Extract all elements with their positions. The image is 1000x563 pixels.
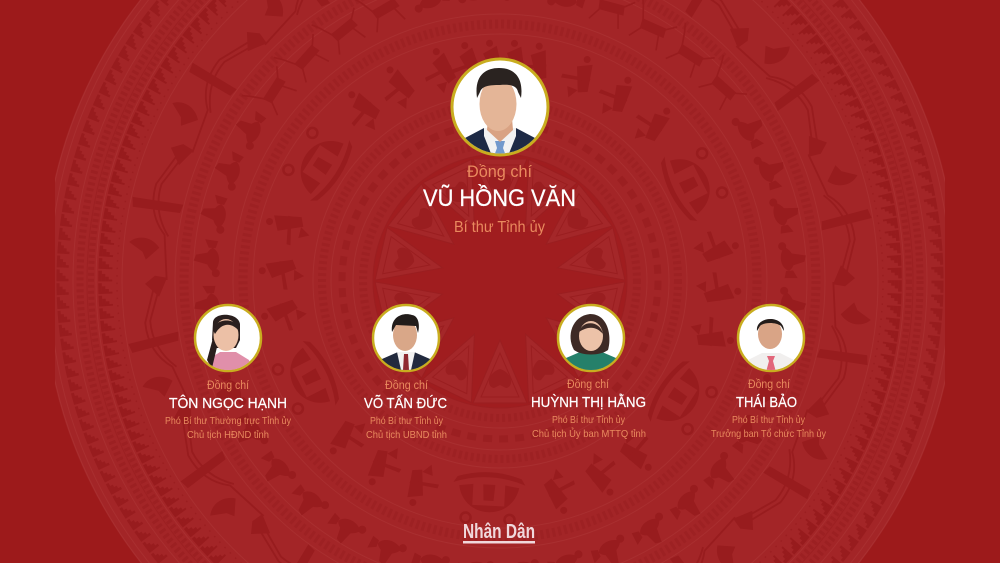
cranes ring	[108, 0, 892, 563]
portrait: Tôn Ngọc Hạnh	[195, 305, 261, 372]
label: Đồng chí: Đồng chí	[207, 380, 250, 392]
role line 1: Phó Bí thư Tỉnh ủy	[732, 414, 806, 426]
main name: VŨ HỒNG VĂN	[423, 184, 576, 212]
name: VÕ TẤN ĐỨC	[364, 395, 447, 412]
portrait: Võ Tấn Đức	[373, 305, 439, 372]
boats and figures ring	[258, 39, 742, 526]
panel: Thái Bảo	[711, 305, 827, 440]
panel: Huỳnh Thị Hằng	[531, 305, 646, 440]
role line 2: Chủ tịch Ủy ban MTTQ tỉnh	[532, 427, 646, 440]
name: TÔN NGỌC HẠNH	[169, 395, 287, 412]
logo: Nhân Dân: Nhân Dân	[463, 521, 535, 543]
birds and deer ring	[192, 0, 808, 563]
portrait: Thái Bảo	[738, 305, 804, 372]
role line 2: Chủ tịch HĐND tỉnh	[187, 429, 269, 441]
main heading: Đồng chí: Đồng chí	[467, 162, 532, 181]
role line 1: Phó Bí thư Tỉnh ủy	[552, 414, 626, 426]
label: Đồng chí: Đồng chí	[567, 379, 610, 391]
name: THÁI BẢO	[736, 394, 797, 411]
portrait: Vũ Hồng Văn	[452, 59, 548, 160]
main role: Bí thư Tỉnh ủy	[454, 219, 545, 236]
role line 2: Chủ tịch UBND tỉnh	[366, 429, 447, 441]
label: Đồng chí: Đồng chí	[748, 379, 791, 391]
label: Đồng chí: Đồng chí	[385, 380, 429, 392]
portrait: Huỳnh Thị Hằng	[558, 305, 624, 372]
role line 1: Phó Bí thư Thường trực Tỉnh ủy	[165, 415, 292, 427]
panel: Tôn Ngọc Hạnh	[165, 305, 292, 441]
star rays	[375, 159, 625, 403]
panel: Võ Tấn Đức	[364, 305, 447, 441]
role line 1: Phó Bí thư Tỉnh ủy	[370, 415, 444, 427]
name: HUỲNH THỊ HẰNG	[531, 393, 646, 411]
role line 2: Trưởng ban Tổ chức Tỉnh ủy	[711, 428, 827, 440]
